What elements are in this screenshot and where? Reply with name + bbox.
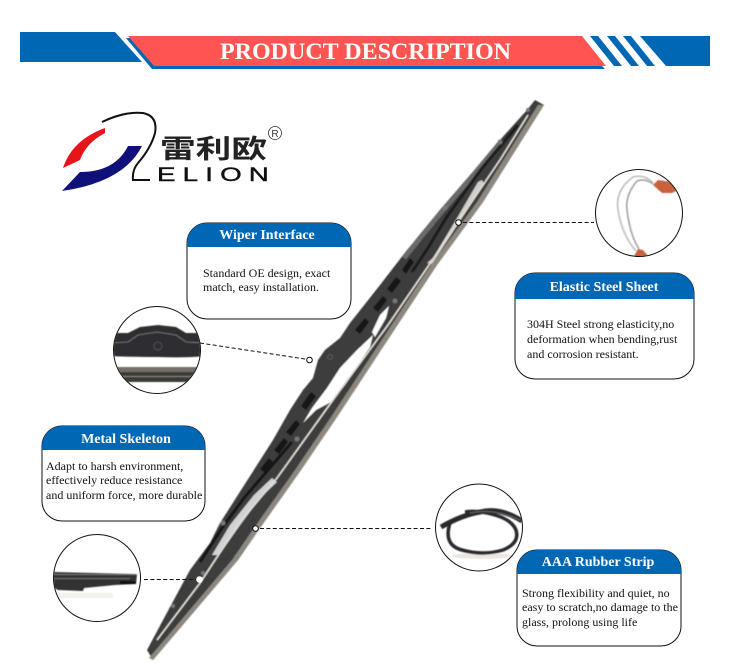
upper frame dark seam xyxy=(412,125,518,272)
icon: interface close-up xyxy=(110,306,205,394)
arm dark blocks xyxy=(260,258,414,473)
panel header xyxy=(515,273,694,299)
panel: rubber strip xyxy=(517,550,681,646)
panel text: and corrosion resistant. xyxy=(527,347,639,361)
callout: wiper interface pointer xyxy=(200,343,312,363)
panel: elastic steel sheet: Elastic Steel Sheet xyxy=(550,280,659,295)
panel: metal skeleton: Metal Skeleton xyxy=(81,432,171,447)
panel: elastic steel sheet xyxy=(515,273,694,379)
panel text: easy to scratch,no damage to the xyxy=(522,600,678,614)
panel header xyxy=(187,223,351,247)
icon: rubber knot close-up xyxy=(436,484,522,571)
main white gap xyxy=(303,335,373,423)
panel header xyxy=(42,426,205,450)
banner xyxy=(20,32,710,69)
panel: metal skeleton xyxy=(42,426,205,521)
upper white slit xyxy=(372,306,389,337)
panel header xyxy=(517,550,681,574)
panel text: Strong flexibility and quiet, no xyxy=(522,586,670,600)
rubber strip xyxy=(149,105,544,660)
logo xyxy=(62,113,282,191)
wiper blade xyxy=(147,100,544,660)
callout: rubber strip pointer xyxy=(253,526,432,531)
panel text: effectively reduce resistance xyxy=(46,473,182,487)
icon: skeleton close-up xyxy=(50,534,140,622)
icon: steel sheet close-up xyxy=(596,170,682,260)
logo: R xyxy=(271,129,279,140)
panel: wiper interface: Wiper Interface xyxy=(219,228,315,243)
lower silver plate xyxy=(212,478,277,555)
bracket rivet xyxy=(328,354,332,360)
panel text: deformation when bending,rust xyxy=(527,332,678,346)
logo: ELION xyxy=(157,164,276,186)
upper frame grey band xyxy=(404,143,500,258)
panel text: and uniform force, more durable xyxy=(46,488,202,502)
panel text: Standard OE design, exact xyxy=(203,266,331,280)
panel text: Adapt to harsh environment, xyxy=(46,459,183,473)
panel text: 304H Steel strong elasticity,no xyxy=(527,317,674,331)
panel: rubber strip: AAA Rubber Strip xyxy=(542,555,654,570)
logo: 雷利欧 xyxy=(160,129,267,166)
panel: wiper interface xyxy=(187,223,351,319)
pivot mounts xyxy=(171,108,530,608)
lower dark seam xyxy=(200,442,292,562)
banner title: PRODUCT DESCRIPTION xyxy=(220,39,511,64)
steel line xyxy=(157,115,528,640)
callout: elastic steel pointer xyxy=(456,220,594,225)
frame silhouette xyxy=(147,100,544,660)
panel text: match, easy installation. xyxy=(203,280,319,294)
panel text: glass, prolong using life xyxy=(522,615,637,629)
callout: metal skeleton pointer xyxy=(144,577,202,582)
upper silver plate xyxy=(427,180,484,264)
